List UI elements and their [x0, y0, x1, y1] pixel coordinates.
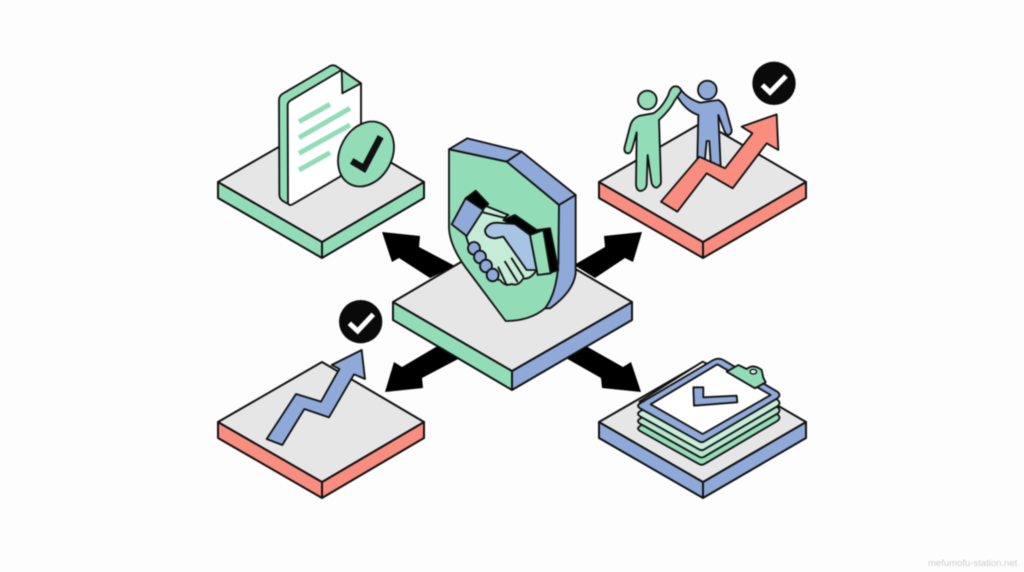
platform base: [599, 122, 806, 258]
panel: center shield platform: [393, 138, 632, 390]
platform base: [218, 362, 424, 498]
panel: bottom-right clipboard platform: [599, 359, 806, 498]
icon: clipboard stack: [638, 359, 779, 465]
icon: check badge: [339, 300, 382, 343]
arrow: to top-left platform: [382, 232, 455, 278]
panel: bottom-left chart platform: [218, 300, 424, 498]
watermark text: mefumofu-station.net: [928, 558, 1018, 569]
panel: top-right team platform: [599, 62, 806, 258]
arrow: to bottom-right platform: [564, 341, 641, 392]
icon: check badge: [752, 62, 796, 105]
icon: blue person: [677, 81, 732, 167]
arrow: to top-right platform: [574, 232, 642, 278]
platform base: [393, 232, 632, 390]
icon: handshake: [452, 191, 558, 285]
icon: growth arrow: [661, 114, 778, 212]
icon: shield with handshake: [449, 138, 576, 321]
icon: growth arrow: [267, 350, 365, 445]
platform base: [599, 362, 806, 498]
arrow: to bottom-left platform: [385, 341, 460, 392]
icon: green person: [624, 86, 681, 191]
icon: document with check: [279, 65, 405, 205]
platform base: [218, 122, 424, 258]
panel: top-left document platform: [218, 65, 424, 258]
